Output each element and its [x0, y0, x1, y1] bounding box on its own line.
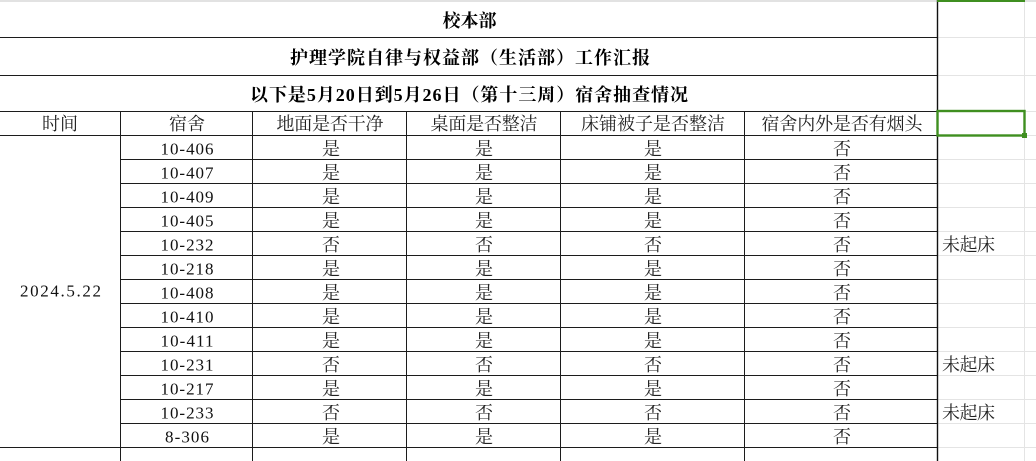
row 10-233: 否: [833, 403, 851, 423]
row 10-409: 是: [644, 187, 662, 207]
row 10-408: 10-408: [160, 284, 214, 302]
row 10-232: 否: [644, 235, 662, 255]
row 8-306: 8-306: [165, 428, 209, 446]
row 10-405: 是: [475, 211, 493, 231]
row 10-407: 是: [475, 163, 493, 183]
row 10-233: [160, 403, 851, 423]
row 10-233: 否: [475, 403, 493, 423]
row 8-306: 是: [475, 427, 493, 447]
row 10-217: 否: [833, 379, 851, 399]
selected cell highlight: [938, 111, 1027, 138]
row 10-218: 是: [322, 259, 340, 279]
row 10-407: [160, 163, 851, 183]
row 10-411: 是: [475, 331, 493, 351]
row 10-231: 10-231: [160, 356, 214, 374]
row 10-410: 10-410: [160, 308, 214, 326]
row 10-408: 是: [644, 283, 662, 303]
row 10-407: 10-407: [160, 164, 214, 182]
row 10-409: 是: [475, 187, 493, 207]
row 10-411: [160, 331, 851, 351]
note: not out of bed, 10-233: 未起床: [942, 403, 995, 423]
row 10-410: 是: [322, 307, 340, 327]
row 10-406: 是: [475, 139, 493, 159]
row 8-306: [165, 427, 851, 447]
row 10-218: 是: [475, 259, 493, 279]
row 10-405: 是: [322, 211, 340, 231]
row 10-232: 否: [322, 235, 340, 255]
row 10-231: [160, 355, 851, 375]
row 10-410: 否: [833, 307, 851, 327]
column headers: 床铺被子是否整洁: [581, 114, 725, 134]
row 10-231: 否: [644, 355, 662, 375]
row 10-409: 10-409: [160, 188, 214, 206]
row 10-405: 否: [833, 211, 851, 231]
column headers: 地面是否干净: [276, 114, 384, 134]
row 10-411: 否: [833, 331, 851, 351]
row 10-217: [160, 379, 851, 399]
row 10-233: 10-233: [160, 404, 214, 422]
selected cell top edge: [937, 0, 1025, 2]
row 10-411: 是: [644, 331, 662, 351]
row 10-217: 是: [644, 379, 662, 399]
inspection date: 2024.5.22: [20, 282, 101, 300]
row 10-217: 是: [475, 379, 493, 399]
row 10-218: 10-218: [160, 260, 214, 278]
title: department work report: 护理学院自律与权益部（生活部）工作汇报: [290, 47, 650, 68]
row 10-411: 10-411: [160, 332, 214, 350]
row 10-411: 是: [322, 331, 340, 351]
column headers: 桌面是否整洁: [430, 114, 538, 134]
row 10-231: 否: [833, 355, 851, 375]
row 10-408: 是: [475, 283, 493, 303]
row 10-406: 是: [644, 139, 662, 159]
row 10-408: [160, 283, 851, 303]
row 10-231: 否: [322, 355, 340, 375]
row 10-218: 是: [644, 259, 662, 279]
row 10-232: 10-232: [160, 236, 214, 254]
row 10-405: [160, 211, 851, 231]
row 8-306: 否: [833, 427, 851, 447]
row 10-406: 是: [322, 139, 340, 159]
row 10-406: [160, 139, 851, 159]
row 10-217: 是: [322, 379, 340, 399]
row 10-233: 否: [644, 403, 662, 423]
note: not out of bed, 10-232: 未起床: [942, 235, 995, 255]
title: school headquarters: 校本部: [442, 11, 496, 31]
row 10-410: [160, 307, 851, 327]
row 10-406: 10-406: [160, 140, 214, 158]
title: weekly inspection summary: 以下是5月20日到5月26日（第十三周）宿舍抽查情况: [250, 84, 688, 105]
row 10-405: 是: [644, 211, 662, 231]
row 10-408: 是: [322, 283, 340, 303]
row 10-232: [160, 235, 851, 255]
row 10-409: 否: [833, 187, 851, 207]
row 8-306: 是: [322, 427, 340, 447]
row 10-407: 否: [833, 163, 851, 183]
column headers: 宿舍: [169, 114, 205, 134]
row 10-231: 否: [475, 355, 493, 375]
row 10-218: 否: [833, 259, 851, 279]
row 8-306: 是: [644, 427, 662, 447]
row 10-409: [160, 187, 851, 207]
column headers: 宿舍内外是否有烟头: [762, 114, 924, 134]
row 10-233: 否: [322, 403, 340, 423]
row 10-407: 是: [644, 163, 662, 183]
row 10-409: 是: [322, 187, 340, 207]
column headers: 时间: [42, 114, 78, 134]
row 10-218: [160, 259, 851, 279]
row 10-232: 否: [475, 235, 493, 255]
row 10-408: 否: [833, 283, 851, 303]
row 10-405: 10-405: [160, 212, 214, 230]
row 10-217: 10-217: [160, 380, 214, 398]
row 10-407: 是: [322, 163, 340, 183]
row 10-410: 是: [475, 307, 493, 327]
row 10-410: 是: [644, 307, 662, 327]
row 10-232: 否: [833, 235, 851, 255]
row 10-406: 否: [833, 139, 851, 159]
note: not out of bed, 10-231: 未起床: [942, 355, 995, 375]
column headers: [42, 114, 924, 134]
